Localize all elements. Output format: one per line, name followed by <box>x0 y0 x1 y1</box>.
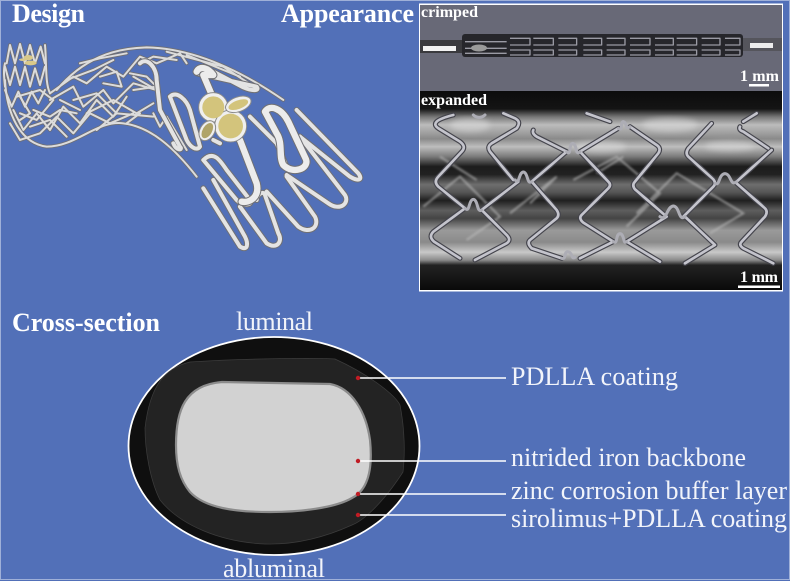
label: luminal: luminal <box>236 307 313 336</box>
label text: sirolimus+PDLLA coating <box>511 504 787 533</box>
icon: small end gold markers <box>19 55 37 65</box>
photo: crimped stent <box>420 5 782 91</box>
illustration: 3D stent design <box>4 44 360 248</box>
crimped stent body <box>462 34 743 57</box>
photo frame <box>419 4 783 292</box>
icon: marker hub with gold inserts <box>196 93 253 144</box>
photo: expanded stent <box>420 91 782 290</box>
leader: nitrided iron backbone <box>356 443 746 472</box>
scale bar: crimped: 1 mm <box>740 68 780 85</box>
label: crimped: crimped <box>421 4 478 21</box>
micrograph: strut cross-section <box>128 337 420 555</box>
label text: PDLLA coating <box>511 362 678 391</box>
label text: zinc corrosion buffer layer <box>511 476 787 505</box>
leader: sirolimus+PDLLA coating <box>356 504 787 533</box>
blurred background lattice <box>423 157 743 240</box>
sirolimus PDLLA and PDLLA coating layer <box>145 358 404 544</box>
nitrided iron backbone with zinc layer <box>176 382 371 512</box>
label: expanded: expanded <box>421 92 487 109</box>
label text: nitrided iron backbone <box>511 443 746 472</box>
leader: PDLLA coating <box>356 362 678 391</box>
catheter <box>420 38 782 53</box>
scale bar: expanded: 1 mm <box>740 269 779 286</box>
stent lattice struts <box>431 113 773 263</box>
heading: Cross-section: Cross-section <box>12 308 161 337</box>
leader: zinc corrosion buffer layer <box>356 476 787 505</box>
outer boundary <box>128 337 420 555</box>
